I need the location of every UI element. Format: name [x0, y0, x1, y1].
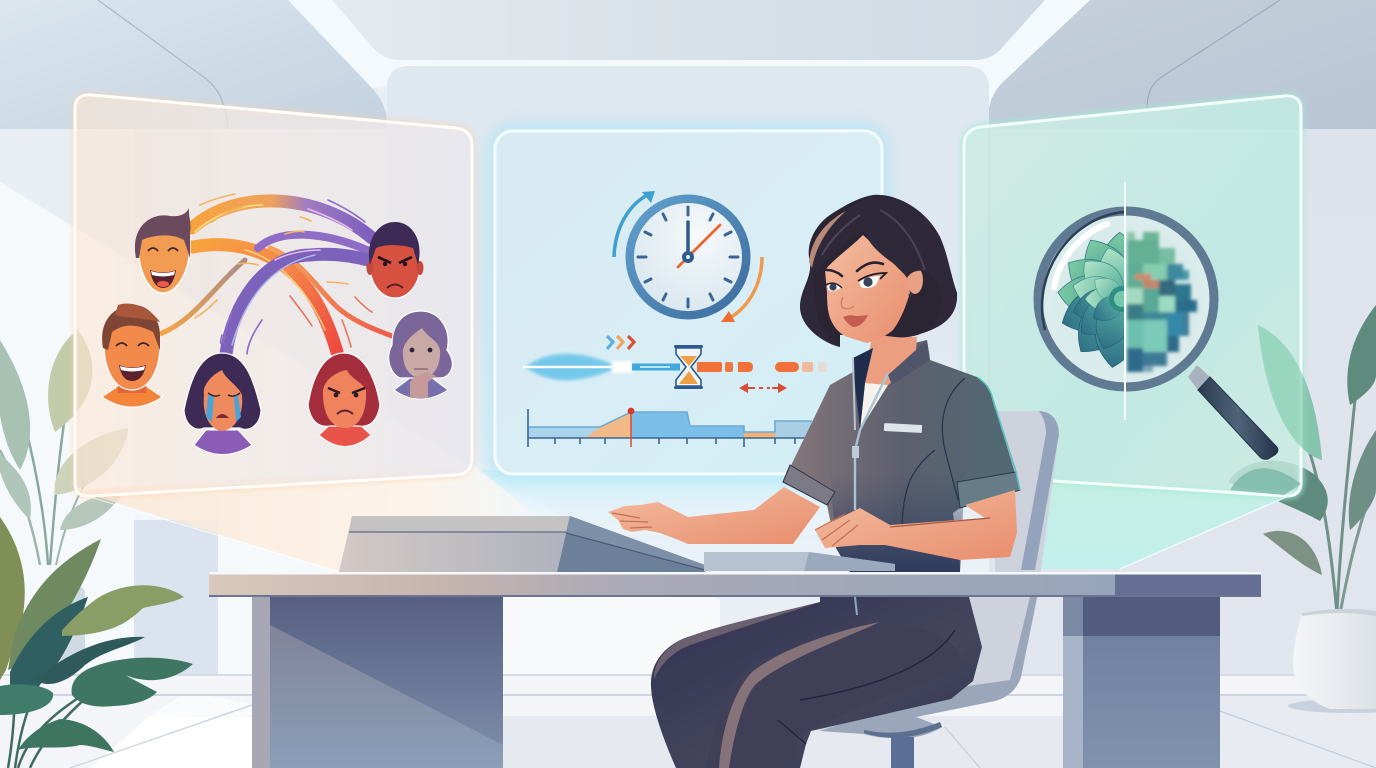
light shaft on wall [0, 182, 720, 675]
flow ribbons [160, 194, 395, 354]
projection beams [75, 464, 1300, 572]
left wall [0, 129, 387, 675]
undershirt [860, 383, 888, 430]
icon: magnifier [1038, 182, 1278, 459]
mint leaf through panel [1258, 325, 1322, 460]
arrow: clockwise blue [614, 191, 655, 257]
panel: time and timeline [495, 131, 882, 474]
arrow: clockwise orange [721, 257, 762, 322]
arm: far [608, 487, 820, 544]
name badge [884, 423, 922, 433]
device on desk [339, 516, 705, 572]
beam: right [1017, 480, 1300, 569]
desk leg left [252, 596, 503, 768]
dashes: delayed signal [697, 362, 827, 372]
torso [783, 340, 1020, 572]
neck [863, 335, 917, 385]
face: laughing man left [102, 304, 162, 407]
flower: sharp half [1058, 232, 1124, 368]
icon: hourglass [674, 345, 703, 389]
hair front [810, 195, 957, 333]
arrow: double-headed [739, 383, 787, 393]
arm: near [815, 490, 1017, 560]
face [823, 235, 923, 343]
legs [651, 597, 982, 768]
ceiling right panel [989, 0, 1376, 129]
rear right plant [1228, 305, 1376, 713]
ceiling light strip [288, 0, 1090, 108]
leaves [0, 517, 25, 680]
centre wall [387, 66, 989, 575]
collar and zipper [852, 340, 930, 510]
beam: left [75, 464, 560, 572]
desk top [209, 572, 1261, 597]
right wall [989, 129, 1376, 675]
flower: pixelated half [1127, 232, 1197, 372]
stems [0, 560, 95, 768]
face: thinking woman [389, 311, 452, 399]
face: angry man [366, 222, 424, 298]
chair back [820, 411, 1059, 768]
desk [209, 572, 1261, 768]
panel: social emotions network [75, 95, 472, 496]
woman [608, 195, 1020, 768]
pot [1288, 609, 1376, 713]
face: laughing man top [135, 208, 191, 293]
desk leg right [1063, 596, 1220, 768]
face: angry woman [308, 353, 380, 446]
light streak [523, 354, 680, 380]
beam: centre [480, 470, 890, 535]
floor [0, 675, 1376, 768]
face: crying woman [184, 353, 261, 454]
compare line [1124, 182, 1126, 420]
chart: timeline [528, 408, 812, 447]
ceiling left panel [0, 0, 387, 129]
icon: chevrons [607, 336, 634, 349]
rear left plant [0, 330, 128, 667]
panel: magnifier compare [964, 96, 1322, 496]
ceiling centre panel [332, 0, 1045, 60]
hair back [800, 195, 957, 347]
keyboard [704, 552, 895, 571]
front left plant [0, 517, 193, 768]
icon: clock [626, 194, 750, 320]
